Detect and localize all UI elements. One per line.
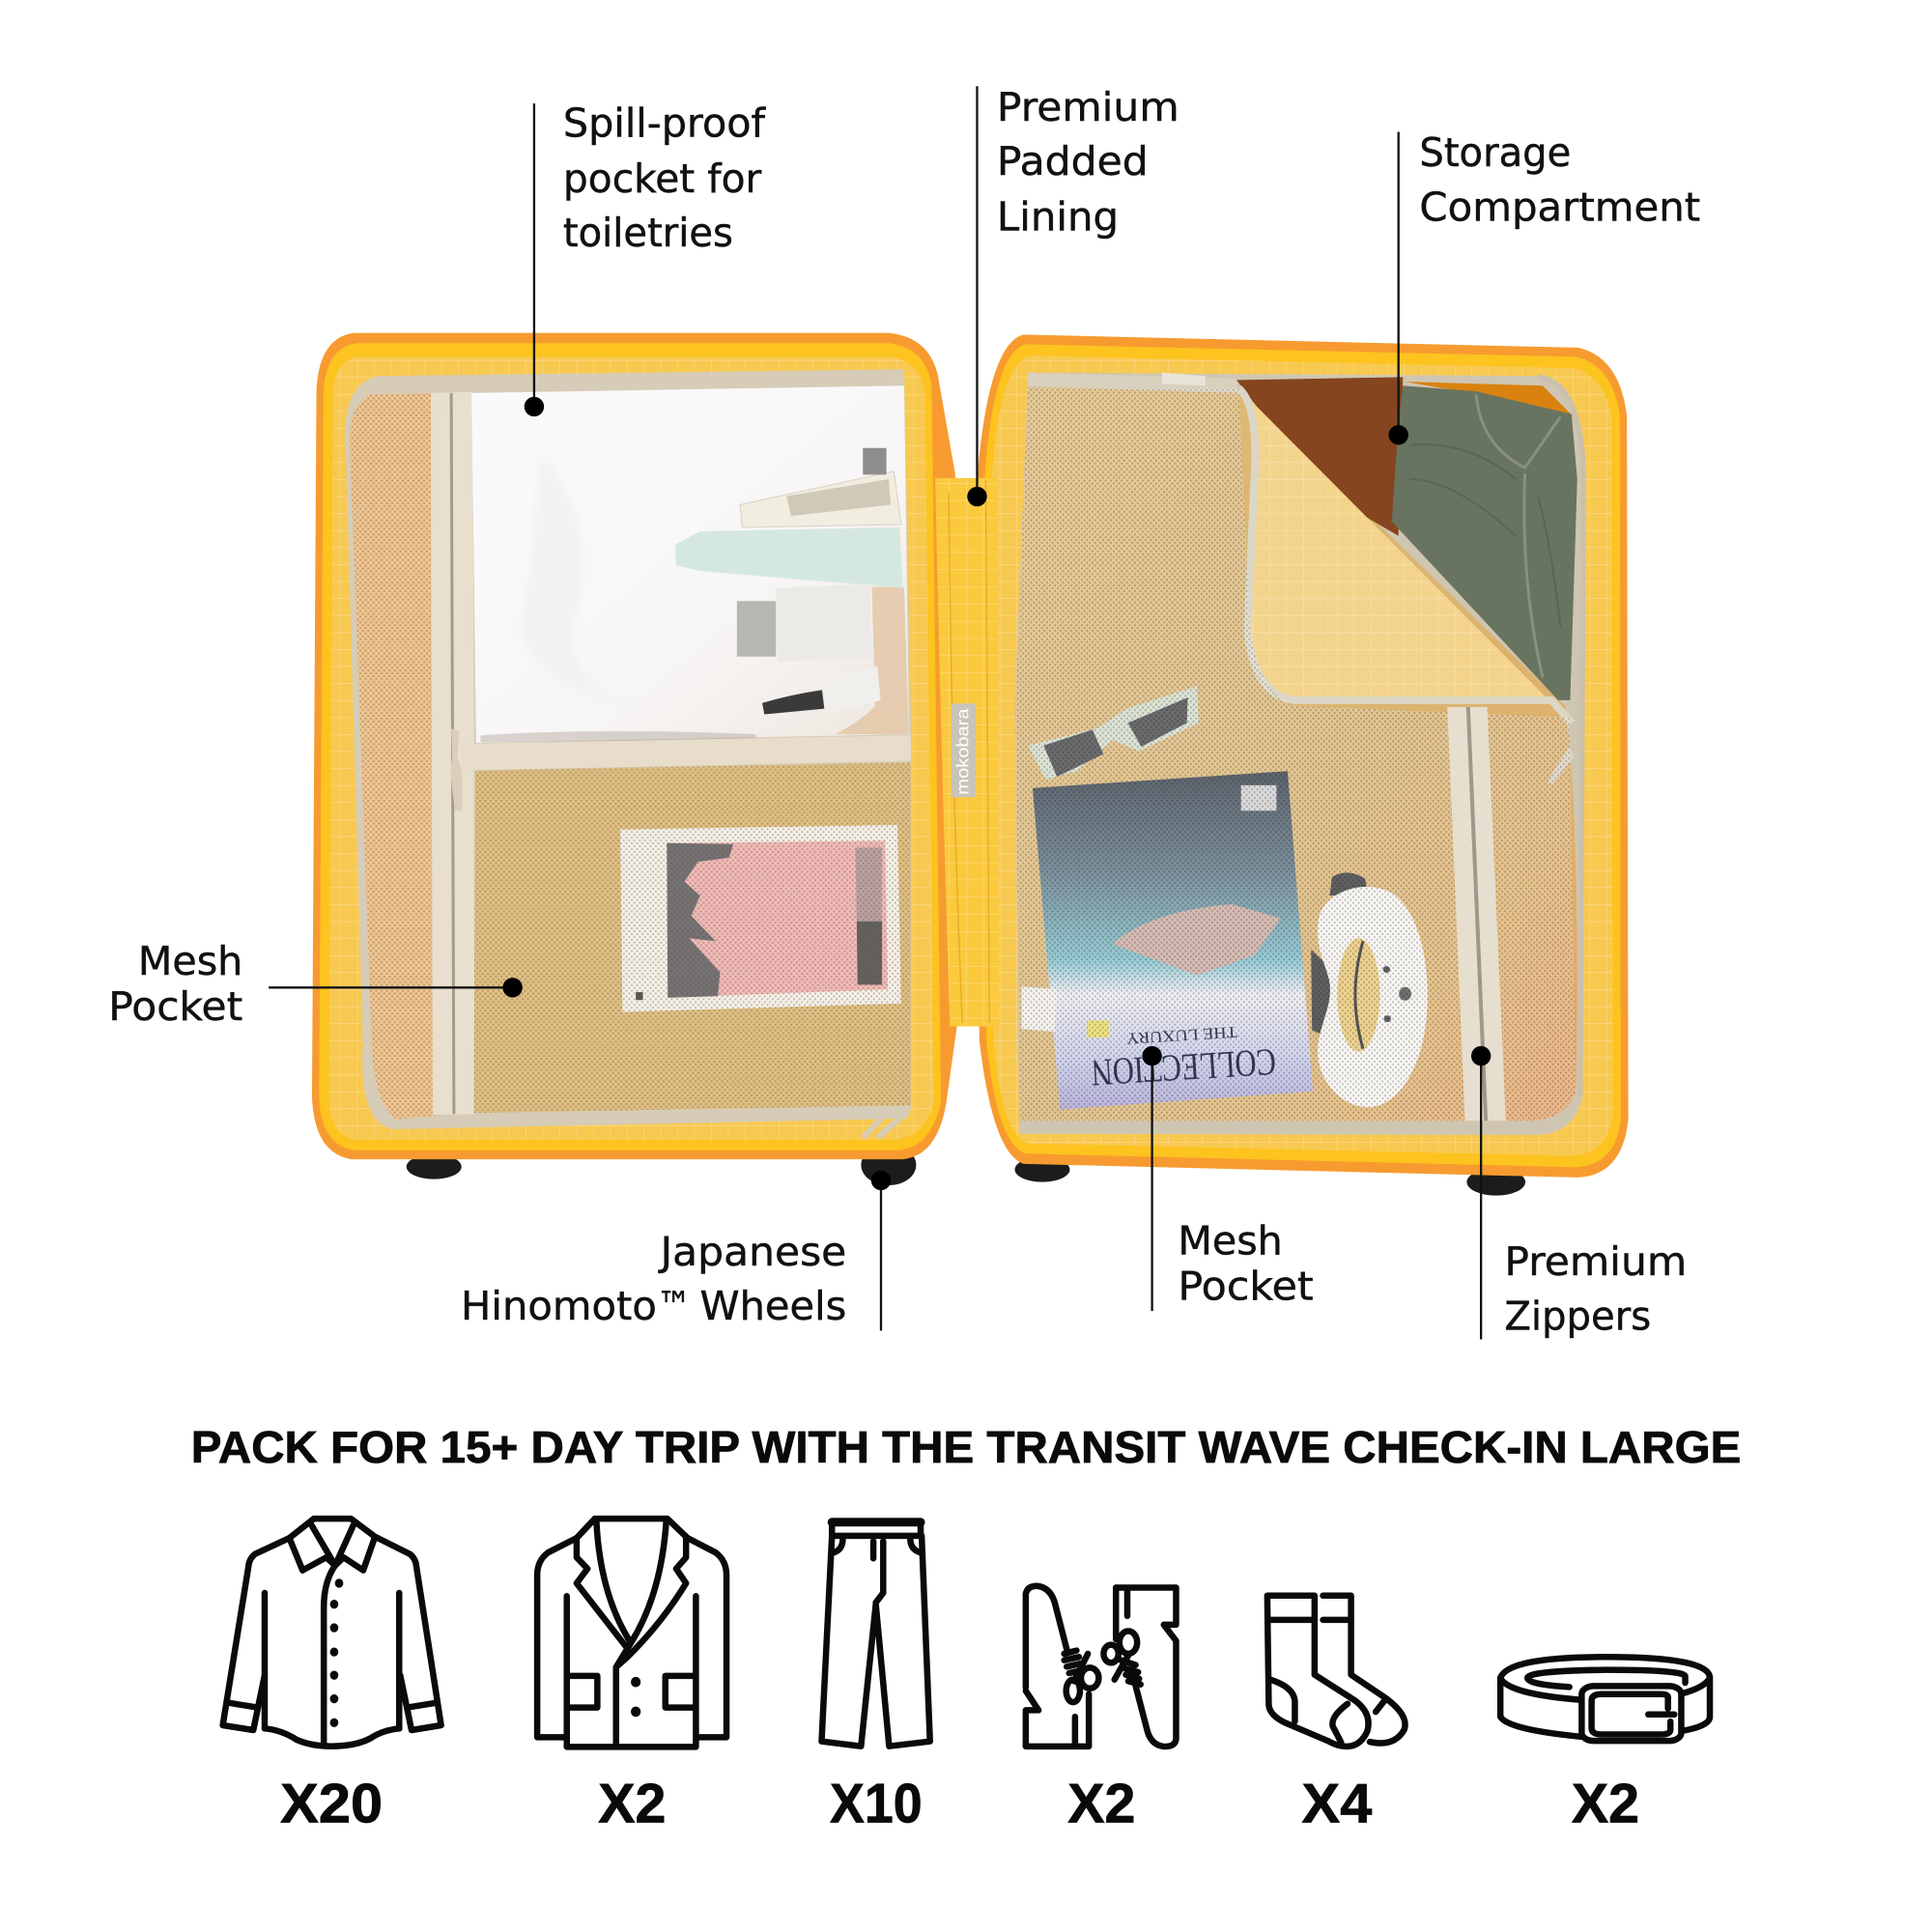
right case orange outer shell [977,334,1629,1178]
quantity labels: X2 [1572,1773,1639,1834]
horizontal zipper band [461,735,911,771]
tube one [740,471,901,527]
vertical zipper band [431,392,475,1115]
top zip [1028,373,1238,393]
icon: blazer [537,1519,726,1747]
sleep mask [1311,872,1428,1107]
icon: belt [1500,1657,1710,1741]
mesh overlay right [1015,387,1576,1121]
right case grid lining [992,355,1612,1156]
bottom zip pulls [863,1112,907,1138]
callout: left mesh pocket: Pocket [108,983,242,1030]
callout: premium padded lining [967,84,1179,506]
quantity labels: X2 [598,1773,666,1834]
callout: hinomoto wheels: Hinomoto [461,1283,657,1329]
left case grid lining [328,356,934,1140]
mokobara tag: mokobara [953,708,973,795]
left side mesh pocket [350,393,440,1120]
icon: shoes [1026,1586,1176,1747]
mokobara tag [952,703,976,797]
callout: left mesh pocket: Mesh [138,938,242,984]
callout: storage compartment: Compartment [1419,184,1700,230]
icon: shirt [223,1519,441,1747]
jar [737,584,871,662]
padded divider strip [935,478,999,1026]
callout: premium zippers: Zippers [1504,1293,1651,1339]
left suitcase shell [312,333,957,1185]
callout: premium zippers: Premium [1504,1238,1687,1285]
icon: socks [1267,1596,1406,1747]
book behind mesh [620,825,901,1012]
callout: right mesh pocket: Mesh [1178,1217,1283,1264]
callout: spill-proof pocket: pocket for [563,156,761,202]
left case orange outer shell [312,333,957,1159]
quantity labels: X10 [830,1773,923,1834]
callout: premium padded lining: Lining [997,194,1119,241]
green denim [1392,385,1577,700]
callout: right mesh pocket: Pocket [1178,1264,1314,1310]
island art [1113,904,1281,975]
callout: right mesh pocket [1142,1046,1314,1311]
magazine title text: COLLECTION [1090,1040,1277,1094]
icon: trousers [822,1522,930,1747]
callout: left mesh pocket [108,938,523,1030]
quantity labels: X4 [1302,1773,1372,1834]
callout: spill-proof pocket: Spill-proof [563,100,767,147]
left case wheels [407,1145,916,1185]
right case yellow zip band [984,344,1621,1167]
left inner zipper surround [345,369,912,1129]
magazine [1021,771,1313,1109]
left case yellow zip band [319,343,941,1151]
right suitcase shell [977,334,1629,1196]
peach reflection [836,587,909,734]
main mesh panel [1015,387,1577,1121]
tube two [675,527,903,588]
callout: hinomoto wheels: ™ [657,1283,692,1329]
quantity labels: X2 [1067,1773,1135,1834]
storage contents [1236,377,1577,700]
dropper bottle [762,667,881,715]
callout: hinomoto wheels: Wheels [699,1283,846,1329]
brown suede [1236,377,1403,536]
quantity labels: X20 [280,1773,383,1834]
callout: hinomoto wheels [461,1171,891,1331]
folded flap [1238,388,1572,723]
callout: premium zippers [1471,1046,1687,1339]
orange lining [1406,382,1574,417]
right vertical zipper band [1447,707,1506,1121]
callout: spill-proof pocket [525,100,767,416]
heading: PACK FOR 15+ DAY TRIP WITH THE TRANSIT WAVE CHECK-IN LARGE [191,1422,1741,1472]
lower mesh pocket [474,762,911,1113]
callout: hinomoto wheels: Japanese [658,1229,846,1275]
quantity labels [280,1773,1639,1834]
magazine title text: THE LUXURY [1125,1023,1237,1048]
callout: premium padded lining: Padded [997,138,1149,185]
right case wheels [1015,1157,1525,1196]
toiletries [675,448,909,734]
callout: storage compartment: Storage [1419,129,1571,176]
mesh overlay [474,762,911,1113]
callout: spill-proof pocket: toiletries [563,210,733,256]
right side zip edge [1538,376,1583,1097]
magazine title text [1089,1021,1277,1094]
callout: storage compartment [1389,129,1700,444]
clear toiletries pocket [471,385,909,743]
right inner zipper surround [1015,373,1586,1135]
callout: premium padded lining: Premium [997,84,1179,130]
sunglasses [1028,686,1199,780]
side zip pull [1548,746,1575,784]
